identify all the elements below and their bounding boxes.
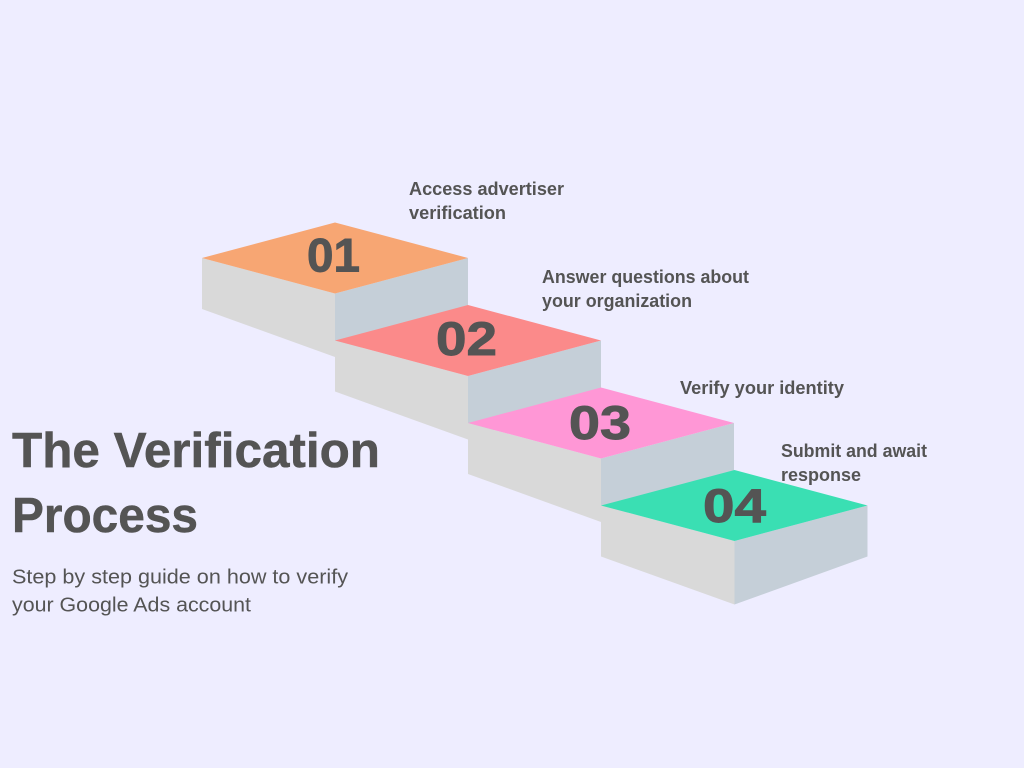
step 3 block xyxy=(468,388,734,522)
step 2 label: your organization xyxy=(542,291,692,311)
step 4 label: response xyxy=(781,465,861,485)
step 1 label xyxy=(409,179,564,223)
step 4 block xyxy=(601,470,868,604)
step 1 label: verification xyxy=(409,203,506,223)
step 1 block: 01 xyxy=(307,230,360,282)
step 4 label: Submit and await xyxy=(781,441,927,461)
step 2 label: Answer questions about xyxy=(542,267,749,287)
subtitle: Step by step guide on how to verify xyxy=(12,566,349,588)
step 2 block: 02 xyxy=(436,313,497,366)
step 2 label xyxy=(542,267,749,311)
step 2 block xyxy=(335,305,601,440)
step 4 block: 04 xyxy=(703,480,767,533)
step 4 label xyxy=(781,441,927,485)
subtitle: your Google Ads account xyxy=(12,594,251,616)
title: The Verification xyxy=(12,424,380,478)
step 1 block xyxy=(202,222,468,357)
subtitle xyxy=(12,566,349,616)
step 1 label: Access advertiser xyxy=(409,179,564,199)
title: Process xyxy=(12,489,198,543)
step 3 label: Verify your identity xyxy=(680,378,844,398)
step 3 block: 03 xyxy=(569,397,631,450)
title xyxy=(12,424,380,543)
